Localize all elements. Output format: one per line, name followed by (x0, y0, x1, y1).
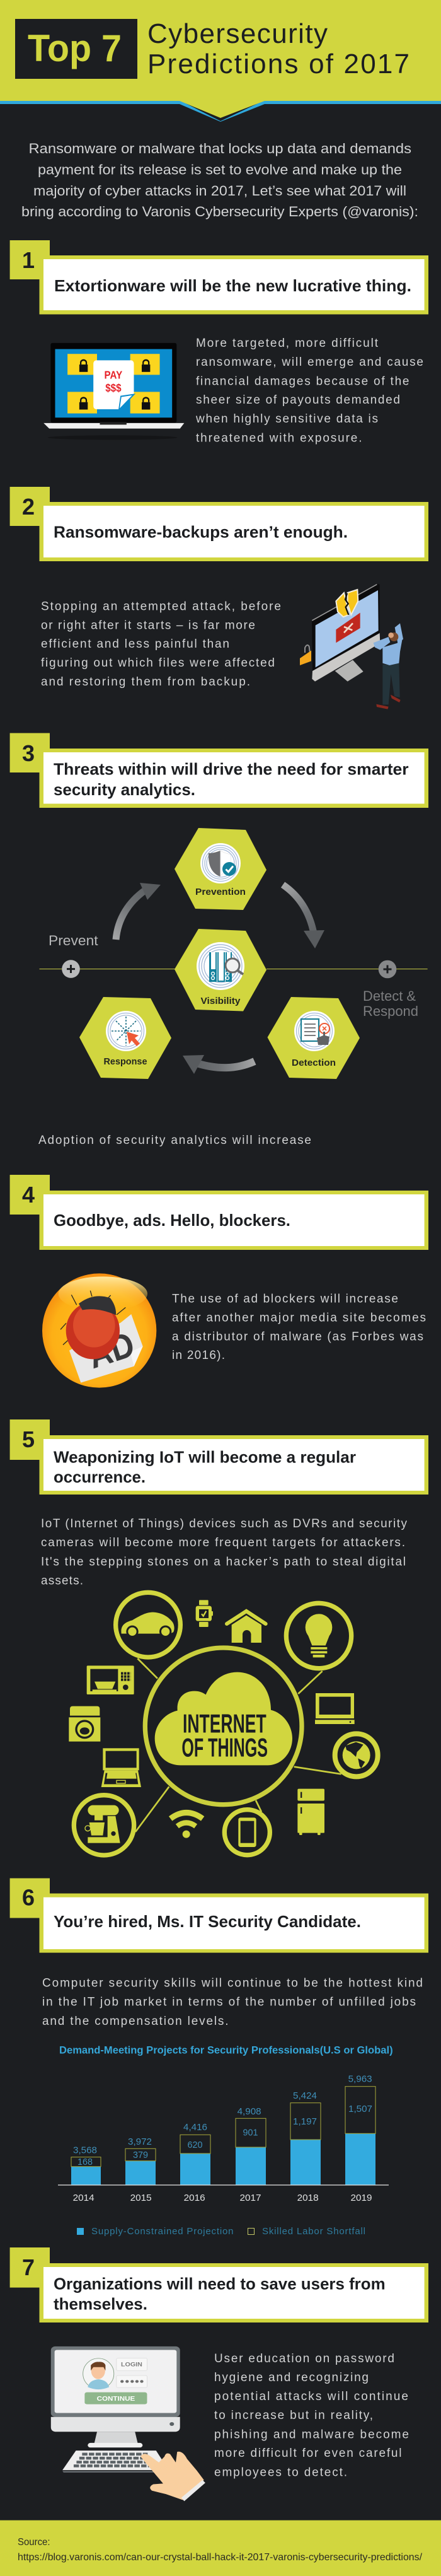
section 1 heading (10, 240, 428, 314)
illustration: login computer with hand: LOGIN (121, 2362, 142, 2368)
section 2 body text: or right after it starts – is far more (41, 619, 255, 632)
section 2 body text: and restoring them from backup. (41, 675, 250, 689)
shortfall value labels (77, 2104, 372, 2167)
section 4 heading: Goodbye, ads. Hello, blockers. (54, 1211, 290, 1230)
total value labels: 3,568 (73, 2145, 97, 2155)
section 6 heading: You’re hired, Ms. IT Security Candidate. (54, 1912, 361, 1931)
section 4 body text: after another major media site becomes (172, 1312, 426, 1324)
year labels: 2015 (130, 2193, 152, 2203)
section 5 heading: 5 (22, 1426, 35, 1452)
chart legend: Supply-Constrained Projection (91, 2226, 233, 2237)
title (147, 18, 410, 79)
icon: ad bug badge: AD (83, 1324, 139, 1377)
header banner (0, 0, 441, 122)
icon: flat laptop (315, 1693, 355, 1724)
section 1 heading: Extortionware will be the new lucrative thing. (54, 276, 411, 295)
total value labels: 5,424 (293, 2090, 317, 2101)
section 5 heading (10, 1419, 428, 1495)
intro paragraph: bring according to Varonis Cybersecurity Experts (@varonis): (21, 204, 418, 219)
section 3 heading: security analytics. (54, 780, 195, 799)
total value labels: 4,416 (183, 2122, 207, 2133)
bars: skilled labor shortfall (71, 2087, 375, 2167)
arrow: Prevent to Prevention (116, 883, 161, 940)
hexagon: Visibility: Visibility (200, 996, 241, 1006)
section 7 body text: more difficult for even careful (214, 2447, 402, 2460)
central circle and cloud: INTERNET (183, 1709, 266, 1738)
bars: supply-constrained projection (71, 2133, 375, 2185)
section 2 heading: 2 (22, 494, 35, 520)
shortfall value labels: 168 (77, 2157, 93, 2167)
section 6 body text (42, 1977, 423, 2028)
section 6 body text: and the compensation levels. (42, 2015, 228, 2028)
section 3 heading: Threats within will drive the need for smarter (54, 760, 409, 779)
section 5 body text: IoT (Internet of Things) devices such as DVRs and security (41, 1517, 407, 1530)
timeline axis (39, 960, 428, 978)
shortfall value labels: 1,197 (293, 2116, 317, 2127)
hexagon: Response: Response (103, 1056, 147, 1067)
illustration: login computer with hand (51, 2346, 205, 2501)
icon: laptop ransomware (43, 343, 184, 440)
arrow: Detection to Response (183, 1055, 255, 1074)
total value labels: 4,908 (238, 2106, 261, 2117)
icon: wifi (171, 1812, 203, 1838)
icon: ad bug badge (42, 1273, 156, 1388)
central circle and cloud: OF THINGS (181, 1734, 268, 1763)
label: Detect and Respond: Respond (363, 1003, 418, 1019)
section 7 heading: Organizations will need to save users from (54, 2275, 386, 2293)
bar chart (58, 2074, 389, 2203)
section 4 body text (172, 1293, 426, 1362)
section 2 body text: Stopping an attempted attack, before (41, 600, 281, 613)
icon: light bulb (286, 1603, 352, 1669)
label: Prevent: Prevent (49, 933, 98, 948)
icon: house (227, 1611, 266, 1643)
intro paragraph: Ransomware or malware that locks up data and demands (29, 141, 411, 156)
hexagon: Visibility (175, 929, 266, 1011)
section 1 heading: 1 (22, 247, 35, 273)
icon: laptop ransomware: PAY (105, 370, 122, 382)
section 5 heading: Weaponizing IoT will become a regular (54, 1448, 356, 1467)
arrow: Prevention to Detection (283, 885, 324, 948)
total value labels: 3,972 (128, 2136, 152, 2147)
footer: source (0, 2521, 441, 2576)
section 1 body text: financial damages because of the (196, 375, 410, 388)
year labels (73, 2193, 372, 2203)
intro paragraph (21, 141, 418, 219)
section 3 heading: 3 (22, 740, 35, 766)
illustration: broken security at monitor (300, 584, 403, 709)
icon: smartphone (224, 1810, 270, 1855)
title: Predictions of 2017 (147, 49, 410, 79)
hexagon: Detection: Detection (292, 1058, 336, 1068)
section 4 body text: The use of ad blockers will increase (172, 1293, 398, 1306)
icon: laptop ransomware: $$$ (105, 382, 122, 394)
icon: microwave (87, 1665, 134, 1694)
year labels: 2014 (73, 2193, 94, 2203)
label: Detect and Respond (363, 988, 418, 1019)
section 1 body text: ransomware, will emerge and cause (196, 356, 423, 369)
section 1 body text (195, 337, 423, 445)
section 6 body text: in the IT job market in terms of the number of unfilled jobs (42, 1995, 416, 2009)
illustration: login computer with hand: CONTINUE (97, 2396, 135, 2403)
section 2 heading: Ransomware-backups aren’t enough. (54, 523, 348, 542)
section 5 body text: cameras will become more frequent targets for attackers. (41, 1536, 405, 1549)
section 2 body text: figuring out which files were affected (41, 656, 275, 670)
section 3 heading (10, 733, 428, 808)
icon: stand mixer (74, 1795, 134, 1855)
footer: source: https://blog.varonis.com/can-our-crystal-ball-hack-it-2017-varonis-cybersecurity-predictions/ (18, 2552, 423, 2563)
shortfall value labels: 901 (243, 2128, 258, 2138)
section 6 body text: Computer security skills will continue to be the hottest kind (42, 1977, 423, 1990)
section 2 heading (10, 487, 428, 561)
hexagon: Detection (267, 997, 360, 1079)
hexagon: Prevention (175, 828, 266, 910)
shortfall value labels: 379 (133, 2150, 148, 2160)
footer: source: Source: (18, 2537, 50, 2548)
section 1 body text: sheer size of payouts demanded (196, 393, 400, 407)
section 2 body text: efficient and less painful than (41, 638, 229, 651)
section 6 heading (10, 1878, 428, 1953)
hexagon: Response (79, 997, 171, 1079)
section 7 body text: potential attacks will continue (214, 2390, 408, 2403)
section 7 heading: 7 (22, 2254, 35, 2280)
section 4 heading (10, 1175, 428, 1250)
chart legend: Skilled Labor Shortfall (262, 2226, 365, 2237)
section 4 body text: in 2016). (172, 1349, 225, 1362)
year labels: 2019 (350, 2193, 372, 2203)
section 1 body text: threatened with exposure. (196, 431, 362, 445)
chart legend (77, 2226, 365, 2237)
year labels: 2018 (297, 2193, 319, 2203)
diagram: internet of things (69, 1592, 378, 1855)
shortfall value labels: 1,507 (348, 2104, 372, 2114)
section 2 body text (41, 600, 281, 689)
intro paragraph: payment for its release is set to evolve and make up the (38, 161, 402, 178)
year labels: 2016 (184, 2193, 205, 2203)
section 5 heading: occurrence. (54, 1467, 146, 1486)
section 6 heading: 6 (22, 1885, 35, 1911)
hexagon: Prevention: Prevention (195, 887, 246, 897)
section 4 heading: 4 (22, 1182, 35, 1208)
section 7 heading: themselves. (54, 2295, 147, 2314)
label: Detect and Respond: Detect & (363, 988, 416, 1004)
section 7 body text: hygiene and recognizing (214, 2371, 369, 2384)
icon: car (116, 1592, 180, 1657)
central circle and cloud (145, 1648, 302, 1805)
cycle diagram (39, 828, 428, 1079)
section 7 body text: employees to detect. (214, 2466, 347, 2480)
title badge: Top 7: Top 7 (28, 27, 122, 69)
section 3 caption: Adoption of security analytics will increase (38, 1134, 311, 1147)
icon: fridge (297, 1789, 324, 1835)
shortfall value labels: 620 (188, 2140, 203, 2150)
section 7 heading (10, 2247, 428, 2322)
icon: smartwatch (196, 1600, 213, 1627)
section 7 body text: to increase but in reality, (214, 2409, 373, 2422)
icon: washing machine (69, 1706, 100, 1742)
section 1 body text: when highly sensitive data is (195, 412, 378, 426)
total value labels: 5,963 (348, 2074, 372, 2085)
section 1 body text: More targeted, more difficult (196, 337, 379, 350)
total value labels (73, 2074, 372, 2155)
intro paragraph: majority of cyber attacks in 2017, Let’s see what 2017 will (33, 183, 406, 199)
year labels: 2017 (239, 2193, 261, 2203)
section 5 body text: assets. (41, 1574, 83, 1588)
icon: globe (335, 1734, 378, 1776)
title: Cybersecurity (147, 18, 328, 49)
section 7 body text: phishing and malware become (214, 2428, 409, 2441)
section 7 body text (214, 2352, 409, 2480)
chart title: Demand-Meeting Projects for Security Professionals(U.S or Global) (59, 2044, 393, 2056)
section 4 body text: a distributor of malware (as Forbes was (172, 1330, 423, 1343)
section 7 body text: User education on password (214, 2352, 394, 2365)
section 5 body text (41, 1517, 407, 1588)
section 5 body text: It's the stepping stones on a hacker’s path to steal digital (41, 1556, 406, 1569)
icon: open laptop (101, 1748, 141, 1787)
connector lines (135, 1658, 341, 1832)
